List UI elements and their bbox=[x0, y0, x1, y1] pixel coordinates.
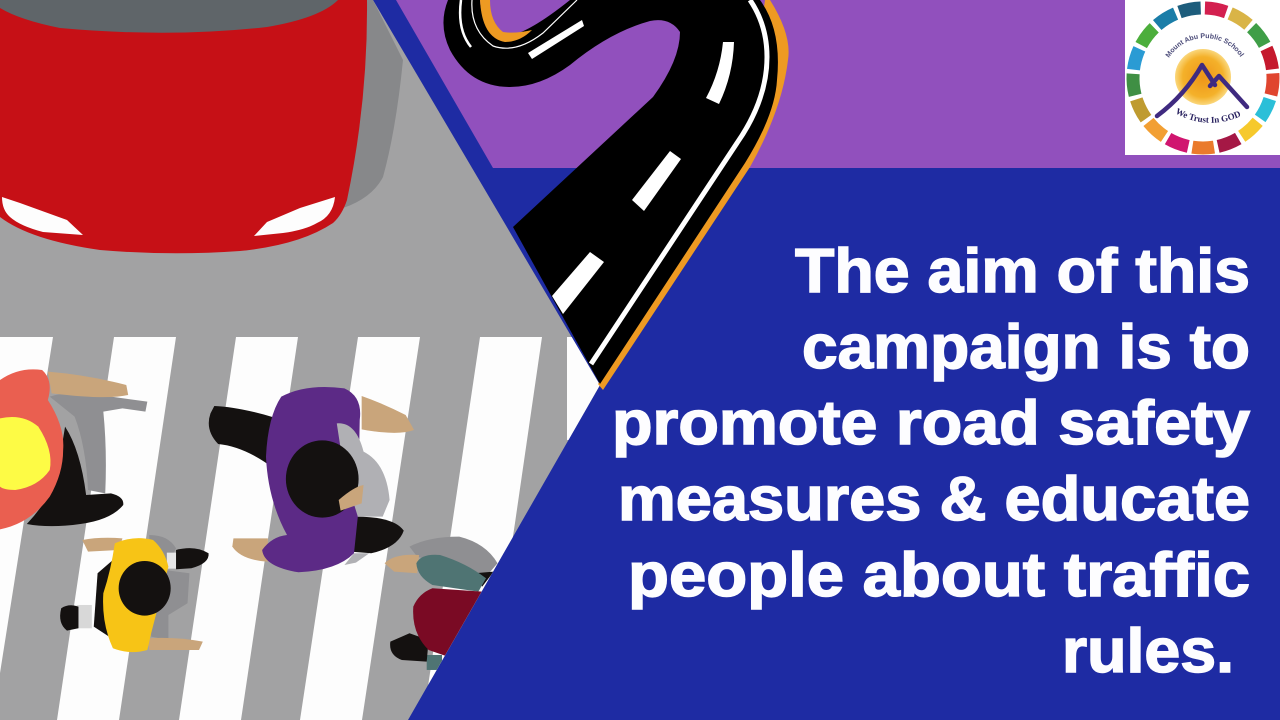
headline text: people about traffic bbox=[628, 541, 1250, 610]
logo sun bbox=[1175, 49, 1231, 105]
panel: street scene bbox=[0, 0, 610, 720]
car windshield bbox=[0, 0, 338, 33]
left headlight bbox=[2, 197, 83, 235]
red car bbox=[0, 0, 367, 253]
road lane lines bbox=[460, 0, 767, 364]
road surface bbox=[0, 0, 610, 720]
pedestrian: yellow top bbox=[60, 535, 209, 652]
headline text bbox=[612, 237, 1251, 686]
headline text: The aim of this bbox=[795, 237, 1250, 306]
panel: purple top band bbox=[396, 0, 1280, 168]
pedestrians bbox=[0, 369, 498, 670]
headline text: measures & educate bbox=[618, 465, 1250, 534]
logo mountain bbox=[1157, 65, 1247, 116]
logo motto: We Trust In GOD bbox=[1177, 108, 1240, 123]
logo: Mount Abu Public School bbox=[1125, 0, 1280, 155]
logo ring of coloured segments bbox=[1104, 0, 1280, 177]
zebra crossing stripes bbox=[0, 337, 610, 720]
car shadow bbox=[343, 0, 403, 208]
headline text: rules. bbox=[1062, 617, 1234, 686]
right headlight bbox=[254, 197, 335, 236]
icon: winding road bbox=[443, 0, 789, 390]
headline text: campaign is to bbox=[802, 313, 1250, 382]
pedestrian: orange and yellow top bbox=[0, 369, 147, 529]
pedestrian: purple top bbox=[209, 387, 414, 572]
logo school name: Mount Abu Public School bbox=[1165, 33, 1244, 58]
headline text: promote road safety bbox=[612, 389, 1251, 458]
pedestrian: maroon top bbox=[385, 537, 498, 670]
